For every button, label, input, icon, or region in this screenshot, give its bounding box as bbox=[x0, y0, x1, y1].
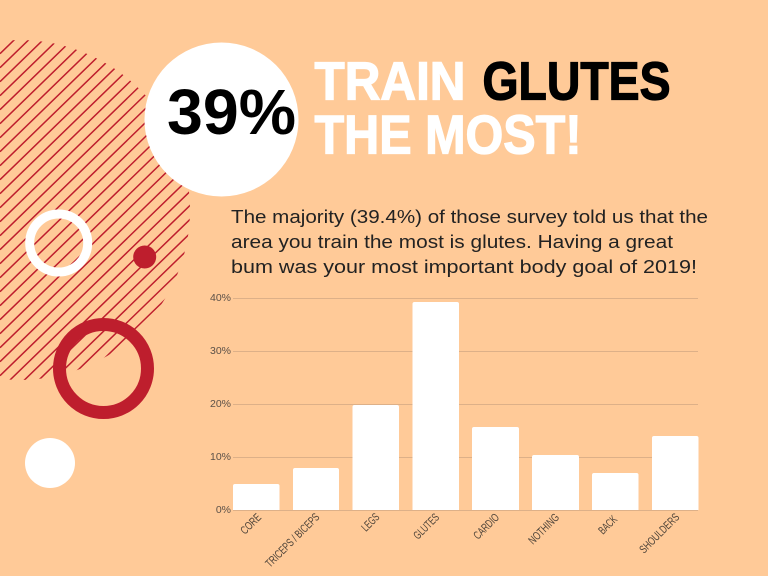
bar chart bbox=[210, 292, 698, 570]
title: THE MOST! bbox=[314, 104, 582, 166]
stat badge: 39%: 39% bbox=[167, 76, 296, 148]
body text: area you train the most is glutes. Having a great bbox=[231, 231, 673, 252]
title bbox=[314, 52, 670, 166]
y axis labels: 0% bbox=[216, 504, 231, 516]
body text: bum was your most important body goal of 2019! bbox=[231, 256, 697, 277]
y axis labels: 20% bbox=[210, 398, 231, 410]
white dot bbox=[25, 438, 75, 488]
x axis labels: CARDIO bbox=[472, 512, 502, 542]
x axis labels: GLUTES bbox=[412, 512, 442, 542]
x axis labels: LEGS bbox=[360, 511, 382, 534]
bars bbox=[233, 302, 698, 510]
stat badge: 39% bbox=[144, 42, 298, 196]
gridlines bbox=[233, 298, 698, 510]
red ring bbox=[60, 324, 148, 412]
red dot bbox=[133, 246, 156, 268]
x axis labels: SHOULDERS bbox=[638, 511, 682, 556]
x axis labels: BACK bbox=[597, 514, 620, 537]
body text: The majority (39.4%) of those survey told us that the bbox=[231, 206, 708, 227]
y axis labels: 10% bbox=[210, 451, 231, 463]
y axis labels bbox=[210, 292, 231, 516]
y axis labels: 30% bbox=[210, 345, 231, 357]
hatched decorative circle bbox=[0, 40, 190, 380]
x axis labels: NOTHING bbox=[527, 512, 562, 547]
y axis labels: 40% bbox=[210, 292, 231, 304]
x axis labels bbox=[239, 511, 682, 570]
title: TRAIN bbox=[314, 52, 466, 112]
x axis labels: CORE bbox=[239, 512, 264, 537]
body text bbox=[231, 206, 708, 277]
title: GLUTES bbox=[482, 52, 670, 112]
white ring bbox=[30, 214, 88, 272]
x axis labels: TRICEPS / BICEPS bbox=[264, 511, 322, 570]
